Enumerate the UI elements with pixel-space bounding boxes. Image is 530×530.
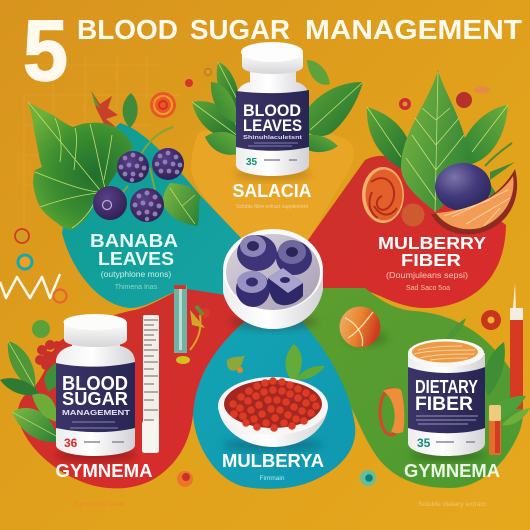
green wedge: gymnema: [273, 285, 523, 488]
title: SUGAR: [190, 14, 290, 45]
icon: salacia bottle: BLOOD: [243, 102, 301, 120]
label: banaba leaves: [90, 230, 178, 269]
icon: dietary fiber canister: 35: [417, 436, 431, 450]
icon: small green leaf: [163, 183, 200, 226]
icon: salacia bottle: [235, 42, 311, 180]
icon: small red accents: [91, 68, 212, 127]
icon: test strip: [142, 315, 159, 453]
icon: side leaves: [367, 105, 508, 168]
icon: red tall tube: [510, 283, 523, 409]
red wedge: mulberry fiber: [273, 156, 506, 308]
icon: orange ball: [340, 306, 388, 348]
label: mulberry fiber: [378, 233, 486, 270]
panel: mulberrya: [218, 344, 328, 482]
title: BLOOD: [77, 14, 178, 45]
icon: ring piece: [236, 271, 270, 307]
icon: yellow-red sprig: [190, 306, 210, 350]
icon: blackberry: [117, 151, 149, 183]
salacia gold wedge: [191, 128, 354, 282]
icon: red ring: [15, 229, 29, 243]
icon: small capsule: [489, 405, 501, 455]
title: MANAGEMENT: [305, 14, 522, 45]
icon: salacia bottle: 35: [246, 157, 258, 168]
caption: salacia: Soluble fibre extract supplement: [236, 204, 308, 210]
number five: 5: [23, 3, 68, 99]
icon: salacia leaves: [192, 60, 363, 155]
panel: salacia: [192, 42, 363, 210]
icon: gymnema bottle: [56, 314, 136, 461]
caption: mulberry fiber: [386, 271, 468, 292]
icon: large green leaf: [401, 70, 468, 212]
caption: banaba leaves: Thimena Inas: [115, 284, 158, 291]
caption: mulberry fiber: (Doumjuleans sepsi): [386, 271, 468, 280]
icon: blueberry: [93, 186, 127, 220]
panel: mulberry fiber: [362, 70, 517, 292]
icon: red berries: [399, 86, 490, 110]
icon: red dot: [177, 471, 193, 487]
label: salacia: SALACIA: [232, 181, 312, 201]
icon: orange ribbon ring: [380, 388, 404, 435]
red berries: [229, 377, 320, 432]
icon: red ball: [402, 204, 424, 226]
caption: banaba leaves: [101, 269, 171, 291]
label: gymnema left: GYMNEMA: [56, 461, 152, 481]
icon: teal tube: [174, 285, 190, 364]
panel: dietary fiber: [340, 283, 530, 508]
icon: teal ring: [18, 255, 32, 269]
icon: teal dot: [360, 470, 376, 486]
caption: mulberry fiber: Sad Saco 5oa: [406, 285, 450, 292]
icon: stem: [120, 127, 173, 195]
icon: blackberry: [152, 148, 184, 180]
label: banaba leaves: LEAVES: [98, 248, 174, 269]
icon: red swirl: [362, 167, 404, 223]
icon: gymnema bottle: BLOOD: [62, 373, 128, 395]
icon: ring piece: [237, 235, 277, 271]
icon: small mixed sprig: [227, 355, 245, 373]
label: mulberrya: MULBERYA: [222, 451, 324, 471]
title: [77, 14, 522, 45]
icon: fruit bowl: [218, 377, 328, 451]
icon: red berry cluster: [35, 340, 61, 370]
icon: dietary fiber canister: DIETARY: [415, 377, 478, 397]
icon: gymnema bottle: SUGAR: [62, 388, 128, 409]
label: gymnema right: GYMNEMA: [404, 461, 500, 481]
caption: gymnema left: Syntoma oiso: [74, 501, 124, 508]
caption: banaba leaves: (outyphlone mons): [101, 269, 171, 279]
icon: red spiral: [150, 92, 176, 118]
icon: blackberry: [130, 188, 164, 222]
icon: small green leaves: [285, 344, 325, 382]
icon: glucose zigzag line: [0, 274, 66, 302]
icon: orange slice: [431, 169, 517, 234]
icon: large leaf: [28, 102, 133, 230]
teal wedge: banaba leaves: [62, 123, 273, 308]
panel: gymnema bottle: [0, 285, 210, 508]
icon: gymnema bottle: MANAGEMENT: [62, 408, 131, 417]
label: mulberry fiber: FIBER: [401, 250, 461, 270]
panel: banaba leaves: [28, 68, 212, 291]
icon: gymnema leaves: [0, 320, 58, 442]
icon: small leaf: [123, 93, 138, 128]
icon: salacia bottle: Shinuhlaculetsnt: [243, 135, 302, 141]
icon: plum: [435, 143, 515, 211]
icon: gymnema bottle: 36: [64, 436, 78, 450]
icon: dietary leaves: [445, 318, 530, 425]
caption: gymnema right: Soluble dietary extract: [418, 502, 486, 508]
icon: salacia bottle: LEAVES: [243, 117, 302, 135]
icon: dietary fiber canister: [408, 339, 486, 461]
label: banaba leaves: BANABA: [90, 230, 178, 251]
center bowl: [223, 229, 323, 330]
decorative chart grid: [24, 55, 180, 230]
icon: ring piece: [268, 268, 303, 305]
teal wedge: mulberrya: [193, 285, 355, 489]
caption: mulberrya: Fimmain: [260, 475, 285, 482]
label: mulberry fiber: MULBERRY: [378, 233, 486, 253]
icon: ring piece: [276, 240, 312, 275]
red wedge: gymnema bottle: [18, 285, 273, 488]
icon: red flower: [481, 310, 501, 330]
icon: dietary fiber canister: FIBER: [415, 394, 473, 415]
